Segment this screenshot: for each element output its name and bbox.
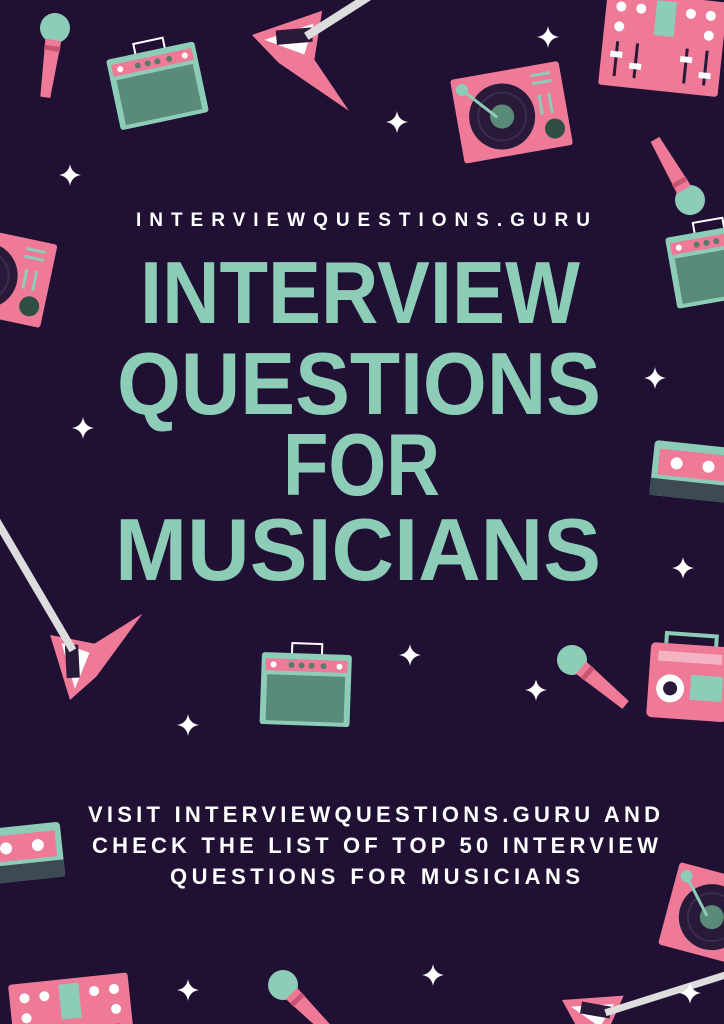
- icon: mixer bottom-left: [8, 972, 137, 1024]
- call to action text: VISIT INTERVIEWQUESTIONS.GURU AND: [88, 802, 660, 827]
- icon: turntable left: [0, 222, 58, 328]
- icon: flying-v guitar top: [244, 0, 483, 119]
- icon: microphone bottom: [262, 964, 343, 1024]
- call to action text: CHECK THE LIST OF TOP 50 INTERVIEW: [92, 833, 658, 858]
- icon: microphone center-right: [551, 639, 635, 716]
- call to action text: [88, 802, 660, 889]
- icon: cassette bottom-left: [0, 822, 65, 885]
- icon: amplifier center: [259, 642, 352, 727]
- icon: cassette right: [649, 440, 724, 503]
- icon: guitar left: [0, 490, 147, 704]
- title: INTERVIEW: [140, 243, 580, 342]
- title: FOR: [283, 415, 440, 514]
- icon: amplifier top-left: [104, 32, 209, 130]
- icon: mixer top-right: [598, 0, 724, 97]
- icon: microphone top-left: [30, 11, 72, 99]
- icon: microphone right: [642, 132, 710, 220]
- title: QUESTIONS: [117, 334, 601, 433]
- icon: guitar bottom-right: [550, 924, 724, 1024]
- icon: amplifier right: [663, 213, 724, 309]
- title: [115, 243, 601, 599]
- icon: turntable top: [450, 61, 573, 164]
- title: MUSICIANS: [115, 500, 601, 599]
- icon: boombox right: [646, 632, 724, 722]
- site name: INTERVIEWQUESTIONS.GURU: [136, 210, 590, 231]
- icon: turntable bottom-right: [658, 862, 724, 973]
- call to action text: QUESTIONS FOR MUSICIANS: [170, 864, 580, 889]
